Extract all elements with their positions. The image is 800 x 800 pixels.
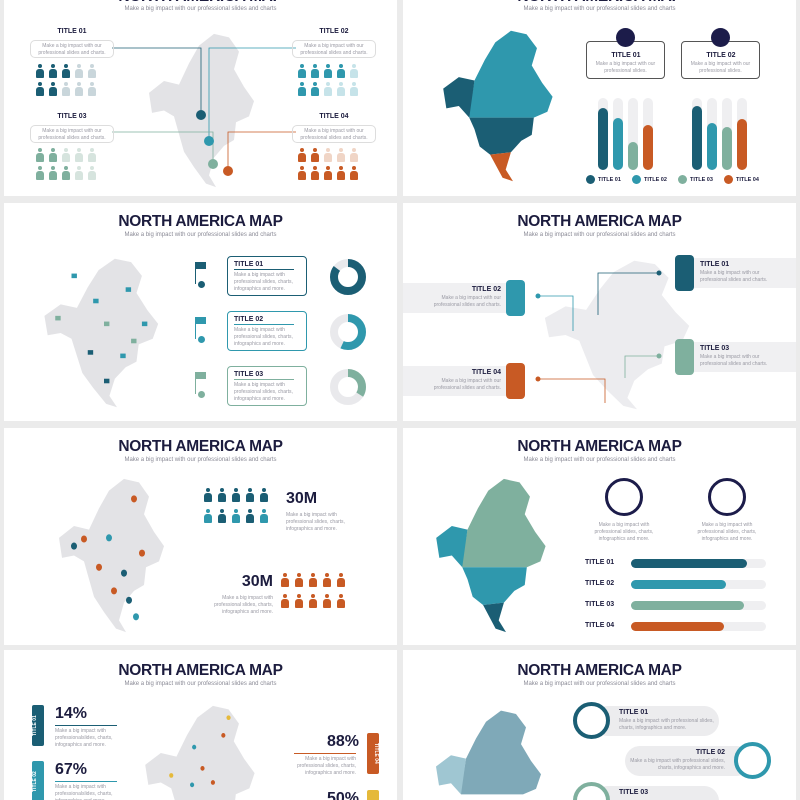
- stat 14%: [32, 705, 117, 748]
- legend: TITLE 04: [736, 177, 759, 183]
- item: title 03: TITLE 03: [619, 789, 648, 796]
- title: NORTH AMERICA MAP: [517, 662, 682, 679]
- card: title 02: TITLE 02: [706, 52, 736, 59]
- legend: [586, 175, 759, 184]
- callout: title 04: TITLE 04: [472, 369, 501, 376]
- icon block 1: [594, 478, 653, 542]
- row 01: TITLE 01: [234, 261, 263, 268]
- callout: title 02: Make a big impact with our professional slides and charts.: [434, 295, 501, 308]
- callout: title 02: TITLE 02: [472, 286, 501, 293]
- item: title 01: Make a big impact with professional slides, charts, infographics and more.: [619, 718, 714, 731]
- item: title 01: TITLE 01: [619, 709, 648, 716]
- people grid 03: [36, 148, 96, 180]
- stat 67%: 67%: [55, 761, 87, 778]
- stat 30M bottom: Make a big impact with professional slides, charts, infographics and more.: [214, 595, 273, 615]
- row 03: TITLE 03: [234, 371, 263, 378]
- title: NORTH AMERICA MAP: [118, 662, 283, 679]
- card: title 01: [586, 28, 665, 79]
- stat 50%: [327, 790, 379, 800]
- map: [149, 34, 254, 187]
- block: title 02: TITLE 02: [319, 28, 349, 35]
- stat 30M top: Make a big impact with professional slides, charts, infographics and more.: [286, 512, 345, 532]
- block: title 04: [292, 113, 376, 143]
- stat 88%: TITLE 04: [373, 743, 379, 764]
- map dots: [145, 706, 254, 800]
- callout: title 01: Make a big impact with our professional slides and charts.: [700, 270, 767, 283]
- connectors: [112, 48, 296, 176]
- callout: title 02: [403, 280, 525, 316]
- card: title 02: Make a big impact with our professional slides.: [691, 61, 750, 74]
- block: title 02: Make a big impact with our professional slides and charts.: [300, 43, 368, 56]
- callout: title 03: [675, 339, 796, 375]
- block: title 03: Make a big impact with our professional slides and charts.: [38, 128, 106, 141]
- card: title 01: TITLE 01: [611, 52, 641, 59]
- map teal shades: [431, 705, 551, 800]
- icon block 1: Make a big impact with professional slides, charts, infographics and more.: [595, 522, 653, 542]
- block: title 04: TITLE 04: [319, 113, 349, 120]
- people grid 04: [298, 148, 358, 180]
- row 02: [195, 311, 366, 351]
- stat 14%: Make a big impact with professionalslides, charts, infographics and more.: [55, 728, 113, 748]
- stat 30M bottom: [214, 573, 273, 615]
- card: title 02: [681, 28, 760, 79]
- item: title 02: TITLE 02: [696, 749, 725, 756]
- subtitle: Make a big impact with our professional slides and charts: [124, 681, 277, 687]
- icon block 2: [698, 478, 756, 542]
- stat 14%: TITLE 01: [32, 715, 38, 736]
- progress bars: TITLE 01: [585, 559, 614, 566]
- panel: slide 1 people map: [4, 0, 397, 196]
- callout: title 03: TITLE 03: [700, 345, 729, 352]
- stat 88%: 88%: [327, 733, 359, 750]
- bar chart 2: [692, 98, 747, 170]
- stat 67%: TITLE 02: [32, 771, 38, 792]
- panel: slide 3 flags donuts: [4, 203, 397, 421]
- subtitle: Make a big impact with our professional slides and charts: [523, 681, 676, 687]
- callout: title 04: [403, 363, 525, 399]
- row 03: Make a big impact with professional slides, charts, infographics and more.: [234, 382, 293, 402]
- stat 88%: [294, 733, 379, 776]
- item: title 02: [625, 742, 771, 780]
- callout: title 03: Make a big impact with our professional slides and charts.: [700, 354, 767, 367]
- block: title 01: TITLE 01: [57, 28, 87, 35]
- subtitle: Make a big impact with our professional slides and charts: [523, 232, 676, 238]
- block: title 01: Make a big impact with our professional slides and charts.: [38, 43, 106, 56]
- row 02: Make a big impact with professional slides, charts, infographics and more.: [234, 327, 293, 347]
- item: title 01: [573, 702, 719, 740]
- title: NORTH AMERICA MAP: [118, 438, 283, 455]
- stat 30M bottom: 30M: [242, 573, 273, 590]
- block: title 04: Make a big impact with our professional slides and charts.: [300, 128, 368, 141]
- map with flags: [44, 258, 158, 407]
- bar chart 1: [598, 98, 653, 170]
- panel: slide 4 callouts: [403, 203, 796, 421]
- callout: title 01: TITLE 01: [700, 261, 729, 268]
- legend: TITLE 01: [598, 177, 621, 183]
- block: title 01: [30, 28, 114, 58]
- subtitle: Make a big impact with our professional slides and charts: [124, 232, 277, 238]
- subtitle: Make a big impact with our professional slides and charts: [523, 457, 676, 463]
- row 03: [195, 366, 366, 406]
- panel: slide 6 progress: [403, 428, 796, 645]
- panel: slide 2 bar charts: [403, 0, 796, 196]
- title: NORTH AMERICA MAP: [517, 213, 682, 230]
- progress bars: TITLE 02: [585, 580, 614, 587]
- map sage: [436, 478, 546, 632]
- map: [59, 479, 164, 632]
- stat 67%: [32, 761, 117, 800]
- people grid teal: [204, 488, 268, 523]
- connectors: [536, 270, 662, 403]
- block: title 02: [292, 28, 376, 58]
- row 01: [195, 256, 366, 296]
- stat 30M top: 30M: [286, 490, 317, 507]
- progress bars: TITLE 04: [585, 622, 614, 629]
- callout: title 01: [675, 255, 796, 291]
- title: NORTH AMERICA MAP: [118, 213, 283, 230]
- callout: title 04: Make a big impact with our professional slides and charts.: [434, 378, 501, 391]
- block: title 03: [30, 113, 114, 143]
- item: title 03: [573, 782, 719, 800]
- panel: slide 8 circles: [403, 650, 796, 800]
- people grid 02: [298, 64, 358, 96]
- people grid 01: [36, 64, 96, 96]
- progress bars: TITLE 03: [585, 601, 614, 608]
- progress bars: [585, 559, 766, 631]
- stat 30M top: [286, 490, 345, 532]
- item: title 02: Make a big impact with professional slides, charts, infographics and more.: [630, 758, 725, 771]
- people grid orange: [281, 573, 345, 608]
- map: [545, 261, 689, 409]
- row 02: TITLE 02: [234, 316, 263, 323]
- subtitle: Make a big impact with our professional slides and charts: [124, 6, 277, 12]
- map colored: [443, 30, 553, 182]
- subtitle: Make a big impact with our professional slides and charts: [523, 6, 676, 12]
- legend: TITLE 02: [644, 177, 667, 183]
- card: title 01: Make a big impact with our professional slides.: [596, 61, 655, 74]
- title: NORTH AMERICA MAP: [517, 438, 682, 455]
- icon block 2: Make a big impact with professional slides, charts, infographics and more.: [698, 522, 756, 542]
- subtitle: Make a big impact with our professional slides and charts: [124, 457, 277, 463]
- stat 14%: 14%: [55, 705, 87, 722]
- panel: slide 7 percentages: [4, 650, 397, 800]
- block: title 03: TITLE 03: [57, 113, 87, 120]
- legend: TITLE 03: [690, 177, 713, 183]
- row 01: Make a big impact with professional slides, charts, infographics and more.: [234, 272, 293, 292]
- stat 88%: Make a big impact with professional slides, charts, infographics and more.: [297, 756, 356, 776]
- panel: slide 5 population: [4, 428, 397, 645]
